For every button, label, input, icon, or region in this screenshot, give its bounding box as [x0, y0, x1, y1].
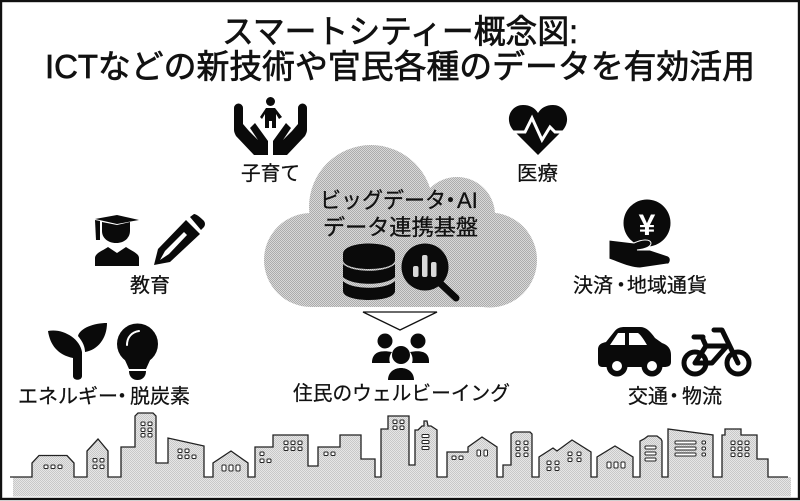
title [45, 13, 755, 85]
label: medical: 医療 [517, 162, 558, 185]
icon: yen coin in hand: ¥ [639, 209, 656, 242]
icon: heart with pulse [508, 105, 570, 155]
icon: yen coin in hand [609, 200, 670, 268]
label: energy and decarbonization: 脱炭素 [130, 385, 190, 408]
icon: graduate [95, 215, 139, 266]
label: transport and logistics: 交通 [628, 385, 668, 408]
cloud heading [320, 188, 478, 240]
icon: residents [372, 334, 429, 380]
icon: bicycle [684, 330, 749, 374]
cloud heading: AI [457, 188, 478, 213]
illustration: city skyline [10, 413, 791, 496]
icon: pencil [154, 214, 205, 265]
cloud shape [264, 145, 537, 308]
icon: database [343, 244, 395, 300]
label: residents wellbeing: 住民のウェルビーイング [293, 382, 510, 405]
cloud heading: ビッグデータ [320, 188, 446, 213]
icon: light bulb [117, 324, 158, 380]
icon: magnifier with bar chart [402, 244, 456, 298]
icon: sprout [48, 323, 107, 380]
label: payment and local currency: 決済 [573, 274, 613, 297]
label: energy and decarbonization: ・ [112, 386, 132, 408]
label: payment and local currency: 地域通貨 [627, 274, 707, 297]
title: スマートシティー概念図: [222, 13, 578, 50]
icon: hands holding child [234, 97, 307, 155]
cloud heading: ・ [440, 188, 462, 213]
label: payment and local currency: ・ [611, 275, 631, 297]
icon: car [598, 327, 671, 376]
label: child rearing: 子育て [241, 162, 300, 185]
title: ICTなどの新技術や官民各種のデータを有効活用 [45, 48, 755, 85]
cloud heading: データ連携基盤 [323, 215, 478, 240]
cloud: big data and AI platform [264, 145, 537, 308]
label: transport and logistics: ・ [664, 386, 684, 408]
label: education: 教育 [130, 274, 170, 297]
windows [44, 420, 749, 471]
label: energy and decarbonization: エネルギー [18, 385, 118, 408]
arrow: triangle from cloud to residents [363, 312, 437, 330]
label: transport and logistics: 物流 [682, 385, 722, 408]
